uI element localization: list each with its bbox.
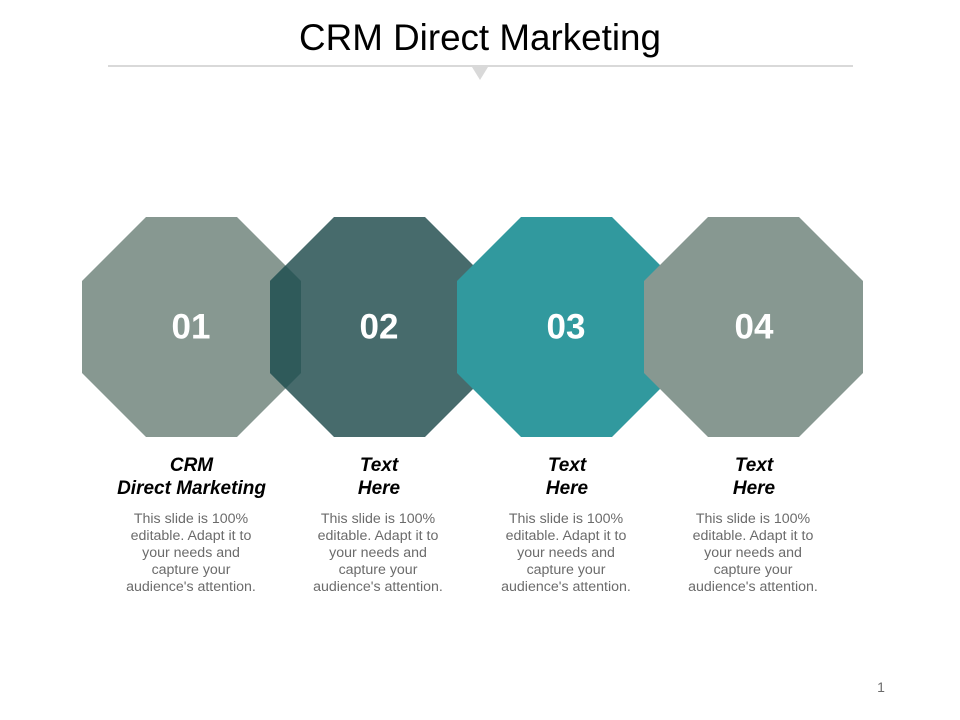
octagon 04 bbox=[644, 217, 863, 437]
title: CRM Direct Marketing bbox=[299, 17, 661, 58]
text block 1: This slide is 100% bbox=[134, 511, 248, 527]
heading 2 bbox=[358, 455, 400, 499]
text block 3 bbox=[501, 511, 631, 595]
text block 2 bbox=[313, 511, 443, 595]
text block 3: editable. Adapt it to bbox=[506, 528, 626, 544]
text block 4: capture your bbox=[714, 562, 792, 578]
heading 3: Here bbox=[546, 478, 588, 499]
octagon 03 bbox=[457, 217, 676, 437]
octagon 01 bbox=[82, 217, 301, 437]
text block 3: audience's attention. bbox=[501, 579, 631, 595]
heading 3: Text bbox=[548, 455, 586, 476]
heading 1: Direct Marketing bbox=[117, 478, 266, 499]
heading 2: Text bbox=[360, 455, 398, 476]
text block 2: editable. Adapt it to bbox=[318, 528, 438, 544]
heading 2: Here bbox=[358, 478, 400, 499]
title divider with pointer bbox=[108, 65, 853, 80]
text block 4: your needs and bbox=[704, 545, 802, 561]
heading 4: Text bbox=[735, 455, 773, 476]
heading 4 bbox=[733, 455, 775, 499]
heading 1: CRM bbox=[170, 455, 213, 476]
heading 4: Here bbox=[733, 478, 775, 499]
text block 4: audience's attention. bbox=[688, 579, 818, 595]
text block 4: This slide is 100% bbox=[696, 511, 810, 527]
octagon 02: 02 bbox=[360, 308, 398, 346]
text block 4 bbox=[688, 511, 818, 595]
text block 1: your needs and bbox=[142, 545, 240, 561]
text block 3: capture your bbox=[527, 562, 605, 578]
text block 2: your needs and bbox=[329, 545, 427, 561]
text block 1: capture your bbox=[152, 562, 230, 578]
heading 3 bbox=[546, 455, 588, 499]
text block 1 bbox=[126, 511, 256, 595]
text block 2: This slide is 100% bbox=[321, 511, 435, 527]
octagon 04: 04 bbox=[735, 308, 774, 346]
text block 1: audience's attention. bbox=[126, 579, 256, 595]
octagon 03: 03 bbox=[547, 308, 585, 346]
text block 4: editable. Adapt it to bbox=[693, 528, 813, 544]
octagon 01: 01 bbox=[172, 308, 210, 346]
heading 1 bbox=[117, 455, 266, 499]
text block 2: capture your bbox=[339, 562, 417, 578]
text block 2: audience's attention. bbox=[313, 579, 443, 595]
text block 3: This slide is 100% bbox=[509, 511, 623, 527]
page number: 1 bbox=[877, 679, 885, 695]
octagon 02 bbox=[270, 217, 489, 437]
text block 1: editable. Adapt it to bbox=[131, 528, 251, 544]
text block 3: your needs and bbox=[517, 545, 615, 561]
